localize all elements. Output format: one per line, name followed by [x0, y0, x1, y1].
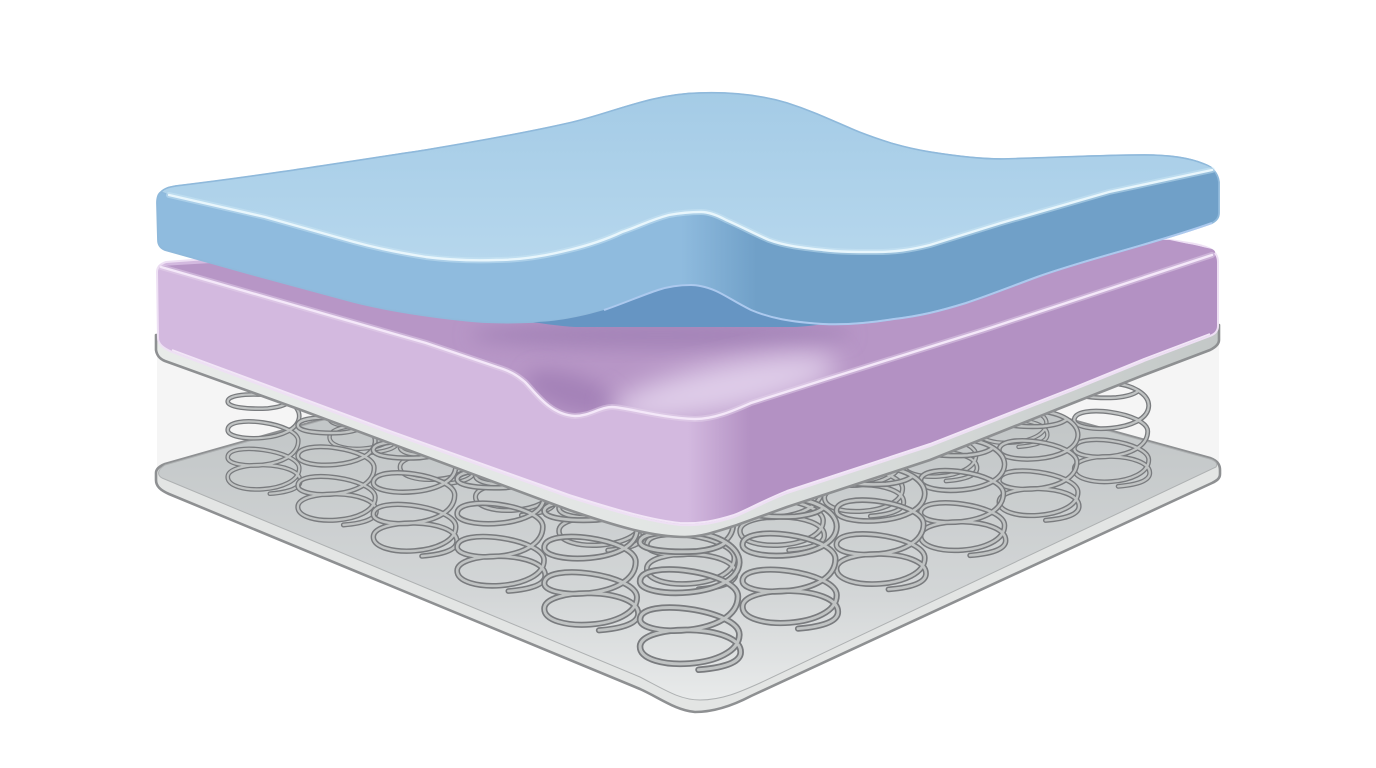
blue layer bright top edge	[169, 170, 1212, 260]
spring	[921, 439, 1006, 555]
shadow beneath blue layer	[486, 323, 834, 350]
panel: bottom base plate	[156, 315, 1220, 712]
spring	[544, 502, 638, 630]
spring	[457, 471, 545, 591]
panel: upper support plate	[156, 325, 1219, 537]
blue layer top surface	[161, 93, 1212, 260]
plate body	[156, 325, 1219, 537]
highlight on top surface	[605, 340, 844, 418]
spring	[373, 442, 457, 556]
spring	[647, 468, 736, 589]
illustration: exploded mattress layers	[154, 92, 1222, 714]
spring	[475, 407, 555, 515]
spring	[654, 348, 722, 442]
panel: purple foam layer	[150, 230, 1230, 525]
spring	[743, 498, 838, 629]
translucent side walls of spring layer	[157, 342, 1219, 520]
purple layer side faces	[157, 230, 1218, 525]
spring	[559, 435, 643, 550]
spring	[816, 348, 884, 442]
spring	[999, 411, 1079, 520]
base plate top surface	[159, 316, 1217, 700]
purple layer top surface with dent	[162, 240, 1215, 415]
spring	[494, 351, 562, 445]
spring	[740, 435, 824, 550]
top surface base colour	[162, 240, 1215, 418]
spring	[979, 353, 1047, 447]
springs: pocket coil grid	[228, 348, 1150, 670]
spring	[903, 380, 977, 481]
panel: blue foam layer	[157, 93, 1219, 327]
blue layer soft edge glow	[169, 170, 1212, 260]
blue layer underside fold	[533, 285, 823, 327]
spring	[400, 383, 474, 484]
spring	[330, 359, 398, 453]
spring	[737, 376, 811, 477]
underside fold highlight	[604, 223, 1212, 324]
spring	[228, 394, 300, 494]
spring	[652, 403, 732, 511]
base plate thickness	[156, 315, 1220, 712]
purple layer bright top edge	[161, 255, 1212, 419]
spring	[298, 418, 376, 525]
spring	[640, 532, 741, 670]
spring	[824, 408, 904, 516]
spring	[836, 467, 926, 589]
spring	[569, 378, 643, 479]
blue layer side faces	[157, 93, 1219, 324]
dent shadow	[528, 369, 613, 413]
spring	[1074, 383, 1150, 486]
purple layer bright bottom edge	[172, 334, 1210, 523]
purple layer soft edge glow	[161, 255, 1212, 419]
